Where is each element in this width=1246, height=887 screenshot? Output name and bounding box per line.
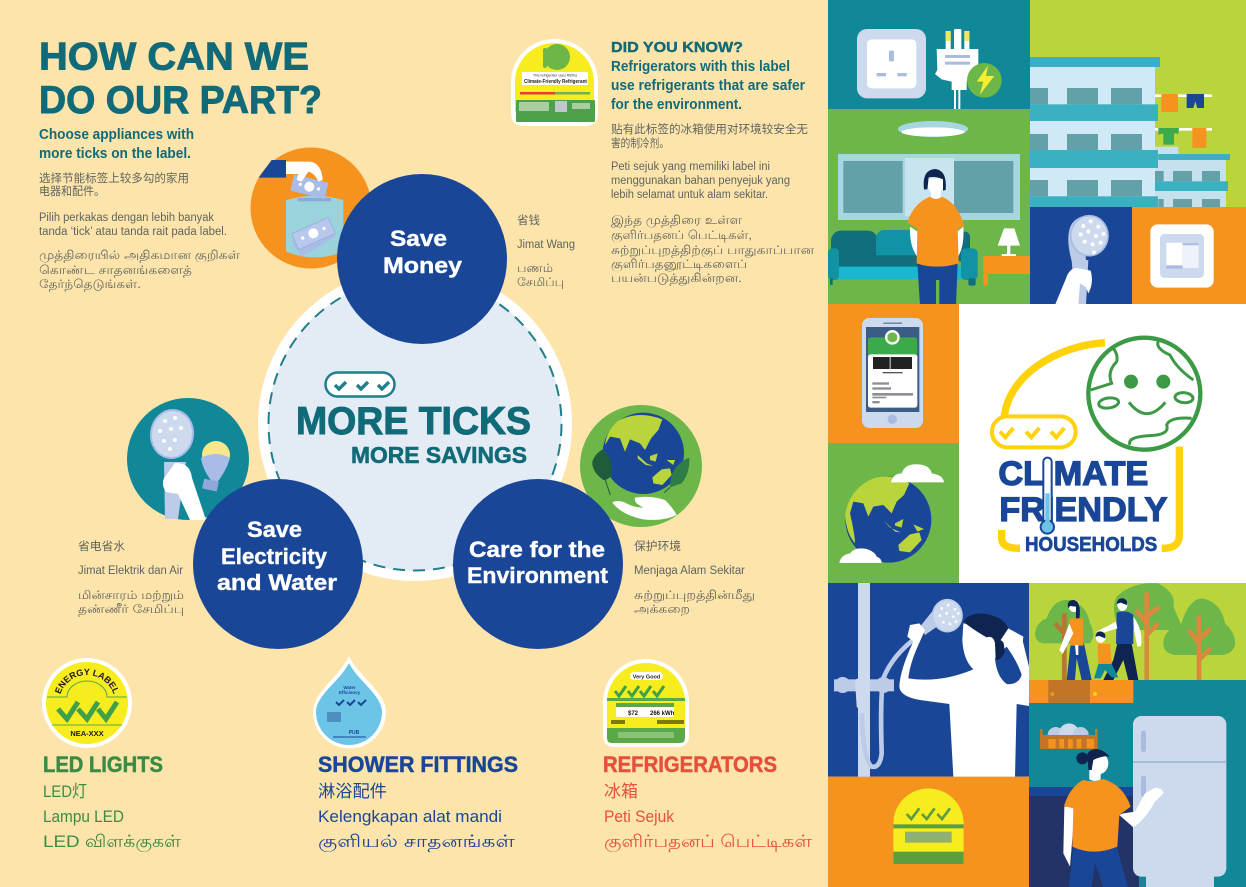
icon: energy label	[42, 658, 132, 748]
icon: shower head and bulb	[127, 398, 249, 520]
icon: energy label: ENERGY LABEL	[54, 668, 118, 694]
person standing	[907, 169, 964, 305]
text block: did you know: DID YOU KNOW?	[611, 39, 743, 56]
kitchen counter	[1029, 787, 1139, 887]
text: save electricity translations	[78, 540, 184, 616]
family in park	[1035, 583, 1235, 680]
text: save money translations	[517, 213, 575, 289]
text block: choose appliances: Pilih perkakas dengan lebih banyak	[39, 212, 214, 224]
text block: choose appliances: 选择节能标签上较多勾的家用	[39, 171, 189, 185]
text block: did you know: Peti sejuk yang memiliki label ini	[611, 161, 770, 173]
icon: refrigerator energy label: Very Good	[633, 674, 660, 680]
text: LED lights: Lampu LED	[43, 807, 124, 826]
icon: water efficiency drop: Water	[343, 685, 356, 690]
mother	[1059, 600, 1092, 680]
icon: refrigerator energy label: $72	[628, 711, 639, 717]
icon: climate-friendly refrigerant label	[511, 39, 598, 126]
icon: hand shower	[1055, 216, 1108, 305]
text: refrigerators: 冰箱	[604, 782, 638, 801]
text block: did you know: 贴有此标签的冰箱使用对环境较安全无	[611, 122, 809, 136]
circle: save money	[337, 174, 507, 344]
text: save electricity translations: Jimat Elektrik dan Air	[78, 565, 183, 577]
icon: tick pill	[326, 372, 394, 396]
sofa	[828, 230, 978, 286]
text: refrigerators: குளிர்பதனப் பெட்டிகள்	[604, 832, 813, 852]
text block: choose appliances: முத்திரையில் அதிகமான குறிகள்	[39, 248, 240, 263]
icon: money jar	[250, 148, 372, 268]
text: save electricity translations: தண்ணீர் சேமிப்பு	[78, 602, 184, 616]
text block: did you know: குளிர்பதனப் பெட்டிகள்,	[611, 228, 752, 242]
icon: table lamp	[998, 228, 1020, 256]
text block: choose appliances: Choose appliances with	[39, 127, 194, 143]
text block: choose appliances: tanda ‘tick’ atau tanda rait pada label.	[39, 226, 227, 238]
icon: light switch	[1150, 224, 1214, 288]
title: DO OUR PART?	[39, 79, 322, 122]
title: HOW CAN WE	[39, 36, 309, 78]
text: environment translations	[634, 539, 755, 616]
text: shower fittings: 淋浴配件	[318, 782, 387, 801]
icon: water efficiency drop: Efficiency	[339, 690, 361, 695]
text: environment translations: அக்கறை	[634, 602, 690, 616]
circle: save electricity and water	[193, 479, 363, 649]
refrigerator	[1133, 716, 1226, 887]
panel: lifestyle illustrations bottom	[828, 583, 1246, 887]
text block: choose appliances: தேர்ந்தெடுங்கள்.	[39, 277, 141, 291]
text: save electricity translations: 省电省水	[78, 540, 126, 553]
text block: choose appliances: 电器和配件。	[39, 184, 105, 198]
icon: refrigerator energy label	[603, 659, 689, 747]
icon: wall socket	[857, 29, 926, 98]
text: shower fittings	[318, 752, 518, 852]
text: save electricity translations: மின்சாரம் மற்றும்	[78, 588, 184, 603]
text block: did you know: சுற்றுப்புறத்திற்குப் பாதுகாப்பான	[611, 243, 814, 258]
person showering	[899, 614, 1029, 777]
icon: phone with digital label	[862, 318, 923, 428]
text block: did you know: இந்த முத்திரை உள்ள	[611, 213, 742, 228]
text block: choose appliances: more ticks on the label.	[39, 146, 191, 162]
text block: did you know: குளிர்பதனூட்டிகளைப்	[611, 257, 747, 272]
icon: energy label: NEA-XXX	[70, 729, 104, 738]
logo: climate friendly households: HOUSEHOLDS	[1025, 534, 1157, 556]
circle: care for the environment: Care for the	[469, 537, 605, 562]
text: shower fittings: குளியல் சாதனங்கள்	[318, 832, 516, 852]
window	[838, 154, 1020, 220]
text: LED lights: LED灯	[43, 782, 87, 801]
text block: did you know: பயன்படுத்துகின்றன.	[611, 271, 742, 286]
text: refrigerators	[603, 752, 813, 852]
circle: save electricity and water: and Water	[217, 570, 337, 595]
logo: climate friendly households: CLIMATE	[998, 455, 1148, 493]
text: LED lights: LED விளக்குகள்	[43, 832, 182, 852]
circle: save electricity and water: Electricity	[221, 544, 328, 569]
text: refrigerators: REFRIGERATORS	[603, 752, 777, 777]
circle: save money: Save	[390, 226, 447, 251]
building	[1030, 57, 1230, 207]
icon: climate-friendly refrigerant label: Climate-Friendly Refrigerant	[524, 79, 587, 85]
icon: globe with leaves and hand	[580, 405, 702, 527]
kitchen cabinet	[1029, 680, 1133, 703]
circle: save money: Money	[383, 253, 463, 278]
text block: did you know: menggunakan bahan penyejuk yang	[611, 175, 790, 187]
shower rail and hose	[834, 583, 962, 777]
logo: climate friendly households: FRIENDLY	[999, 491, 1167, 529]
text block: did you know: use refrigerants that are safer	[611, 78, 805, 94]
circle: save electricity and water: Save	[247, 517, 302, 542]
heading: more ticks more savings: MORE SAVINGS	[351, 442, 527, 468]
logo: climate friendly households	[992, 338, 1200, 556]
heading: more ticks more savings	[296, 400, 531, 468]
panel: phone and earth tiles	[828, 304, 1246, 583]
text block: choose appliances: கொண்ட சாதனங்களைத்	[39, 263, 192, 277]
circle: care for the environment: Environment	[467, 563, 609, 588]
text block: did you know: Refrigerators with this label	[611, 59, 790, 75]
circle: care for the environment	[453, 479, 623, 649]
text: environment translations: சுற்றுப்புறத்தின்மீது	[634, 588, 755, 603]
icon: plug with lightning	[935, 29, 1002, 109]
text block: did you know: for the environment.	[611, 97, 742, 113]
text block: did you know	[611, 39, 814, 286]
dish rack	[1040, 723, 1098, 749]
text block: did you know: 害的制冷剂。	[611, 136, 669, 150]
text: environment translations: 保护环境	[634, 539, 681, 553]
woman at refrigerator	[1063, 749, 1163, 887]
laundry	[1155, 94, 1212, 148]
text: save money translations: பணம்	[517, 261, 553, 275]
text: shower fittings: SHOWER FITTINGS	[318, 752, 518, 777]
icon: water efficiency drop	[313, 656, 386, 748]
child	[1094, 631, 1118, 678]
icon: climate-friendly refrigerant label: This refrigerator uses R600a	[533, 74, 577, 78]
text block: did you know: lebih selamat untuk alam sekitar.	[611, 189, 768, 201]
text: save money translations: சேமிப்பு	[517, 275, 564, 289]
title	[39, 36, 322, 122]
icon: earth with clouds	[839, 464, 944, 563]
icon: refrigerator energy label: 266 kWh	[650, 711, 675, 717]
central circle	[258, 267, 572, 581]
icon: ceiling light	[898, 121, 968, 137]
text: save money translations: 省钱	[517, 213, 540, 227]
text block: choose appliances	[39, 127, 240, 291]
text: LED lights	[43, 752, 182, 852]
side table	[983, 256, 1030, 286]
text: refrigerators: Peti Sejuk	[604, 807, 674, 826]
text: shower fittings: Kelengkapan alat mandi	[318, 807, 502, 826]
text: save money translations: Jimat Wang	[517, 239, 575, 251]
icon: label on orange tile	[893, 788, 964, 864]
icon: water efficiency drop: PUB	[349, 730, 360, 736]
text: environment translations: Menjaga Alam Sekitar	[634, 565, 745, 577]
text: LED lights: LED LIGHTS	[43, 752, 163, 777]
father	[1097, 598, 1141, 680]
heading: more ticks more savings: MORE TICKS	[296, 400, 531, 443]
panel: appliance illustrations top	[828, 0, 1246, 309]
